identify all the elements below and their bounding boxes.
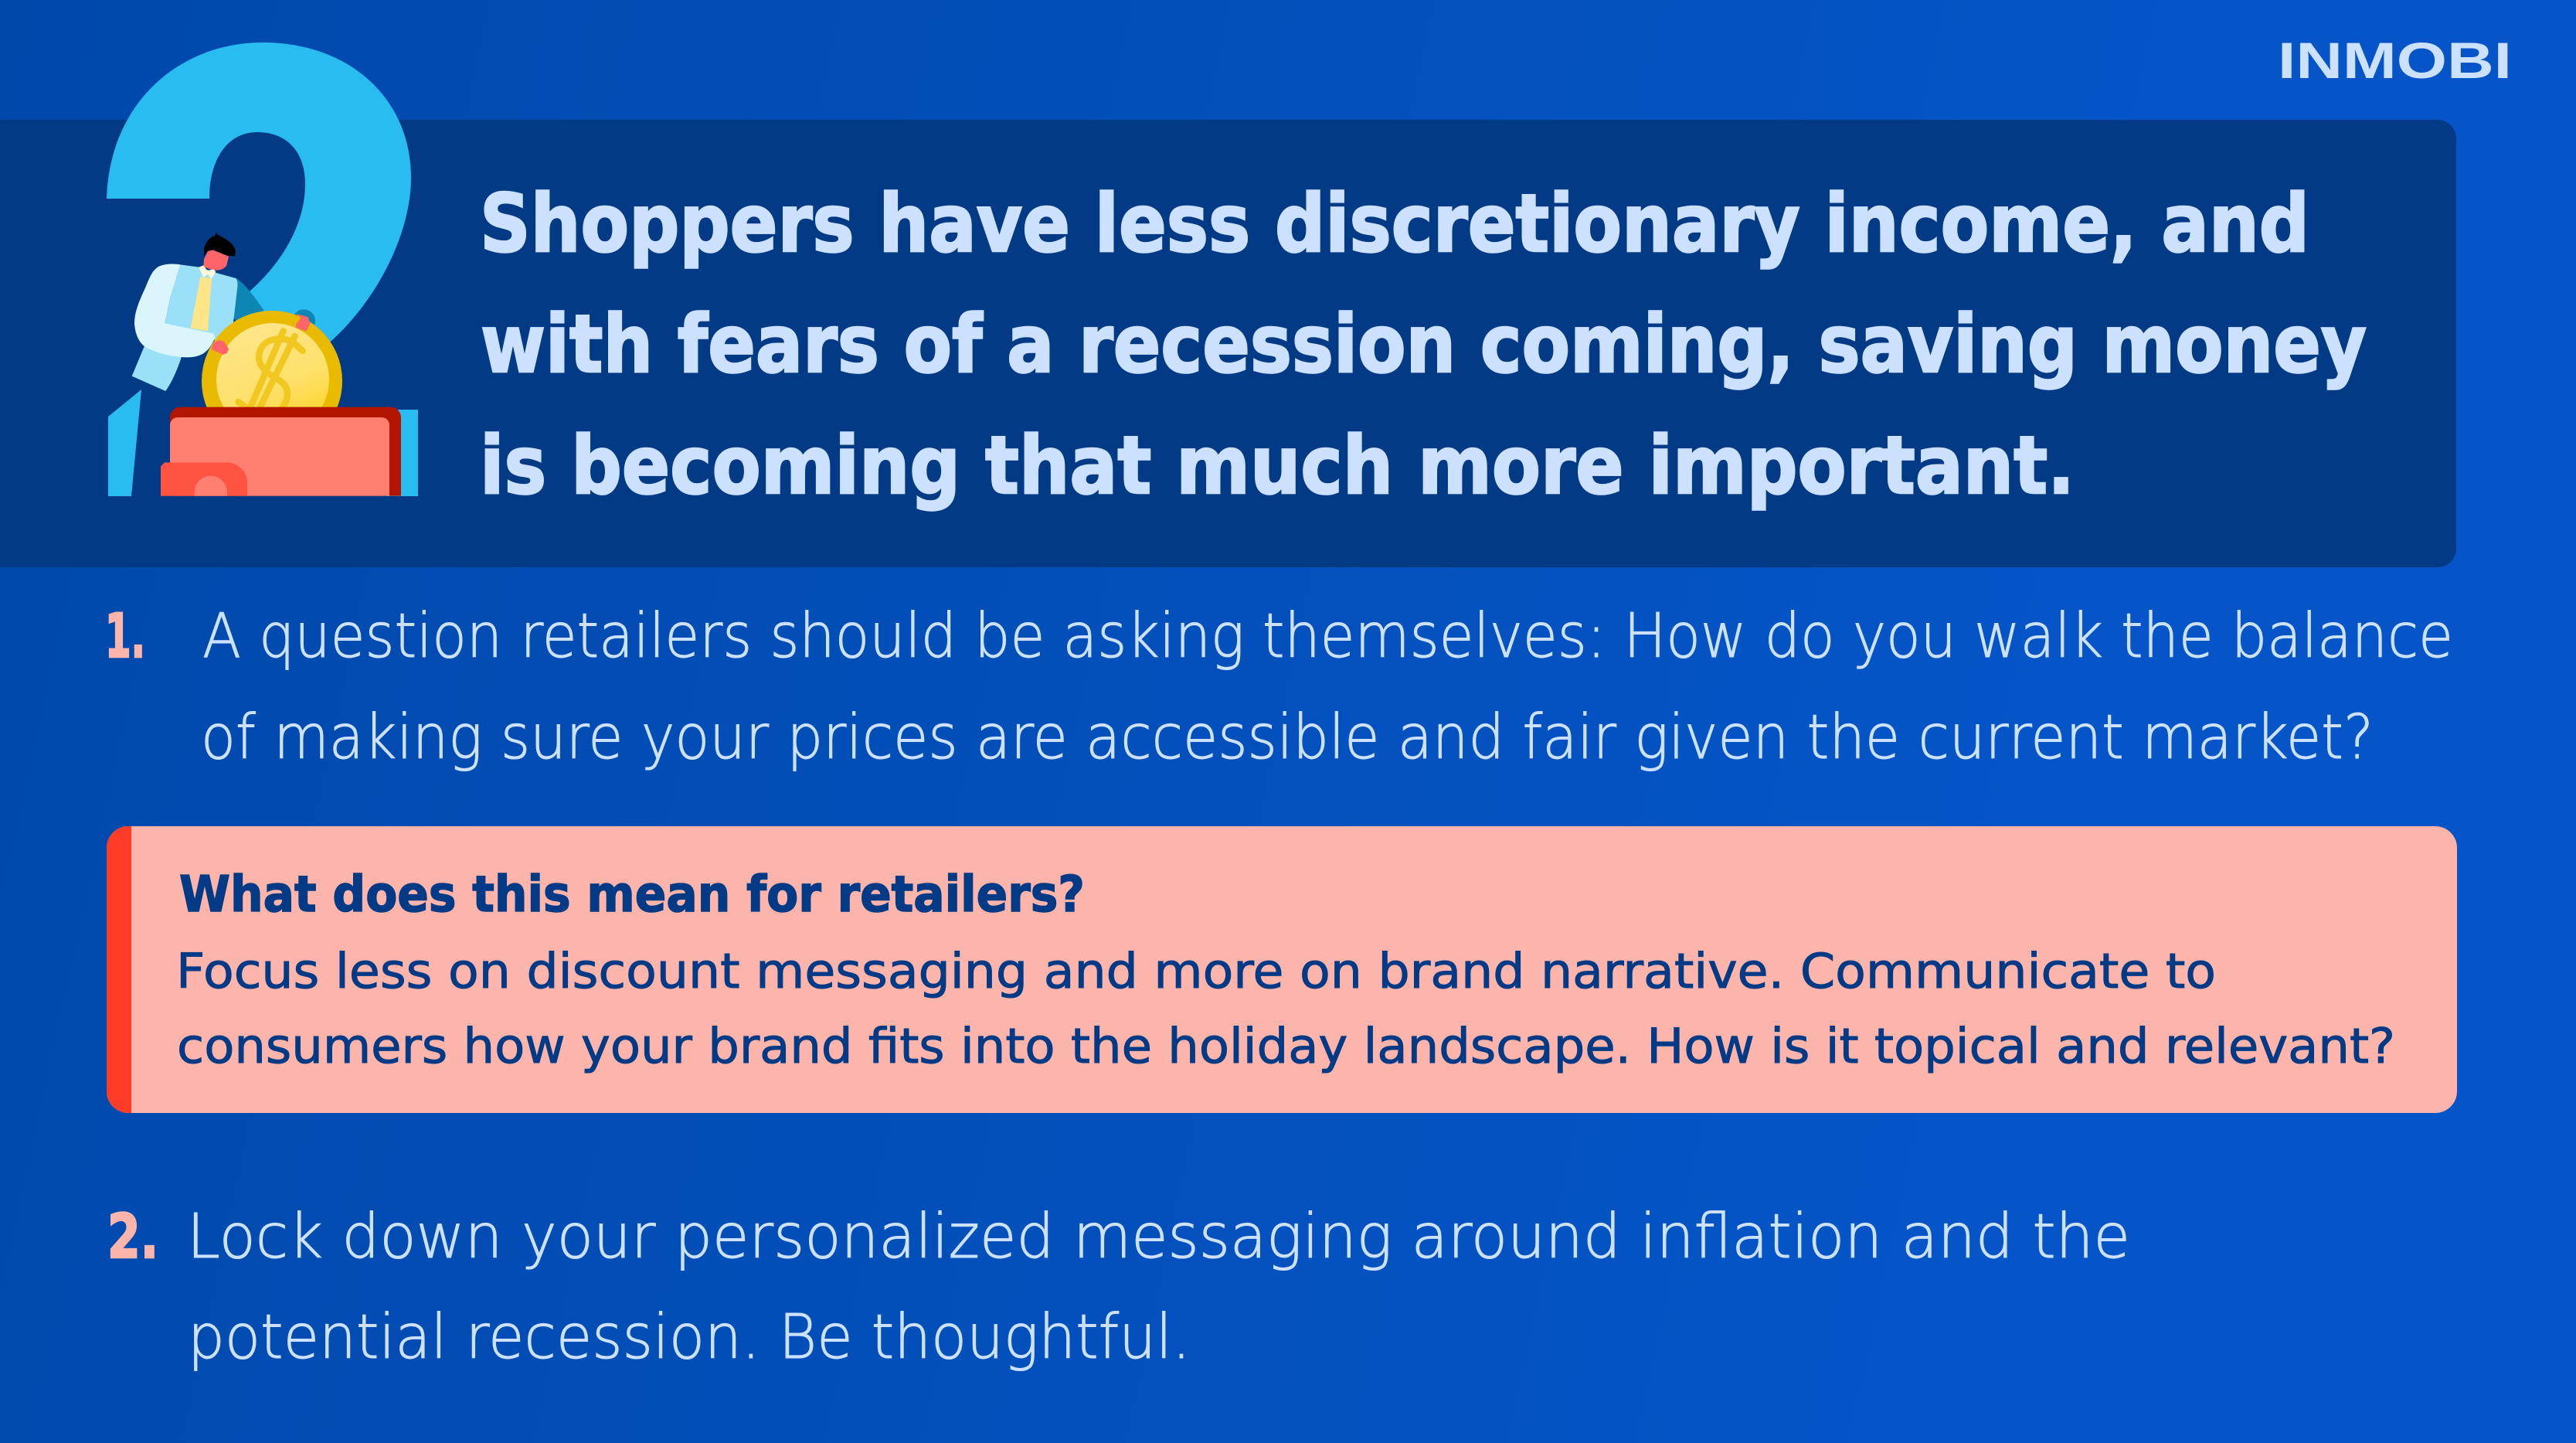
- list item 1: of making sure your prices are accessible and fair given the current market?: [201, 702, 2374, 773]
- heading: is becoming that much more important.: [480, 420, 2075, 512]
- man: [132, 233, 315, 391]
- list item 1: 1.: [105, 602, 145, 672]
- list item 2: [107, 1201, 2130, 1373]
- callout: [107, 826, 2457, 1113]
- callout body: Focus less on discount messaging and more on brand narrative. Communicate to: [176, 943, 2216, 999]
- heading: with fears of a recession coming, saving money: [481, 298, 2367, 391]
- header panel: [0, 120, 2456, 567]
- icon: question mark with man pushing coin into wallet: [107, 43, 418, 496]
- question mark: [107, 43, 418, 496]
- list item 2: 2.: [107, 1203, 158, 1272]
- callout heading: What does this mean for retailers?: [179, 866, 1085, 924]
- callout body: consumers how your brand fits into the holiday landscape. How is it topical and relevant?: [177, 1018, 2395, 1074]
- list item 1: A question retailers should be asking themselves: How do you walk the balance: [202, 601, 2453, 672]
- list item 2: potential recession. Be thoughtful.: [188, 1302, 1191, 1373]
- list item 1: [105, 601, 2453, 773]
- callout body: [176, 943, 2395, 1074]
- heading: [480, 178, 2367, 512]
- heading: Shoppers have less discretionary income, and: [480, 178, 2309, 271]
- coin: [202, 311, 342, 451]
- logo: INMOBI: [2278, 32, 2512, 89]
- wallet: [161, 407, 401, 496]
- list item 2: Lock down your personalized messaging around inflation and the: [187, 1201, 2130, 1272]
